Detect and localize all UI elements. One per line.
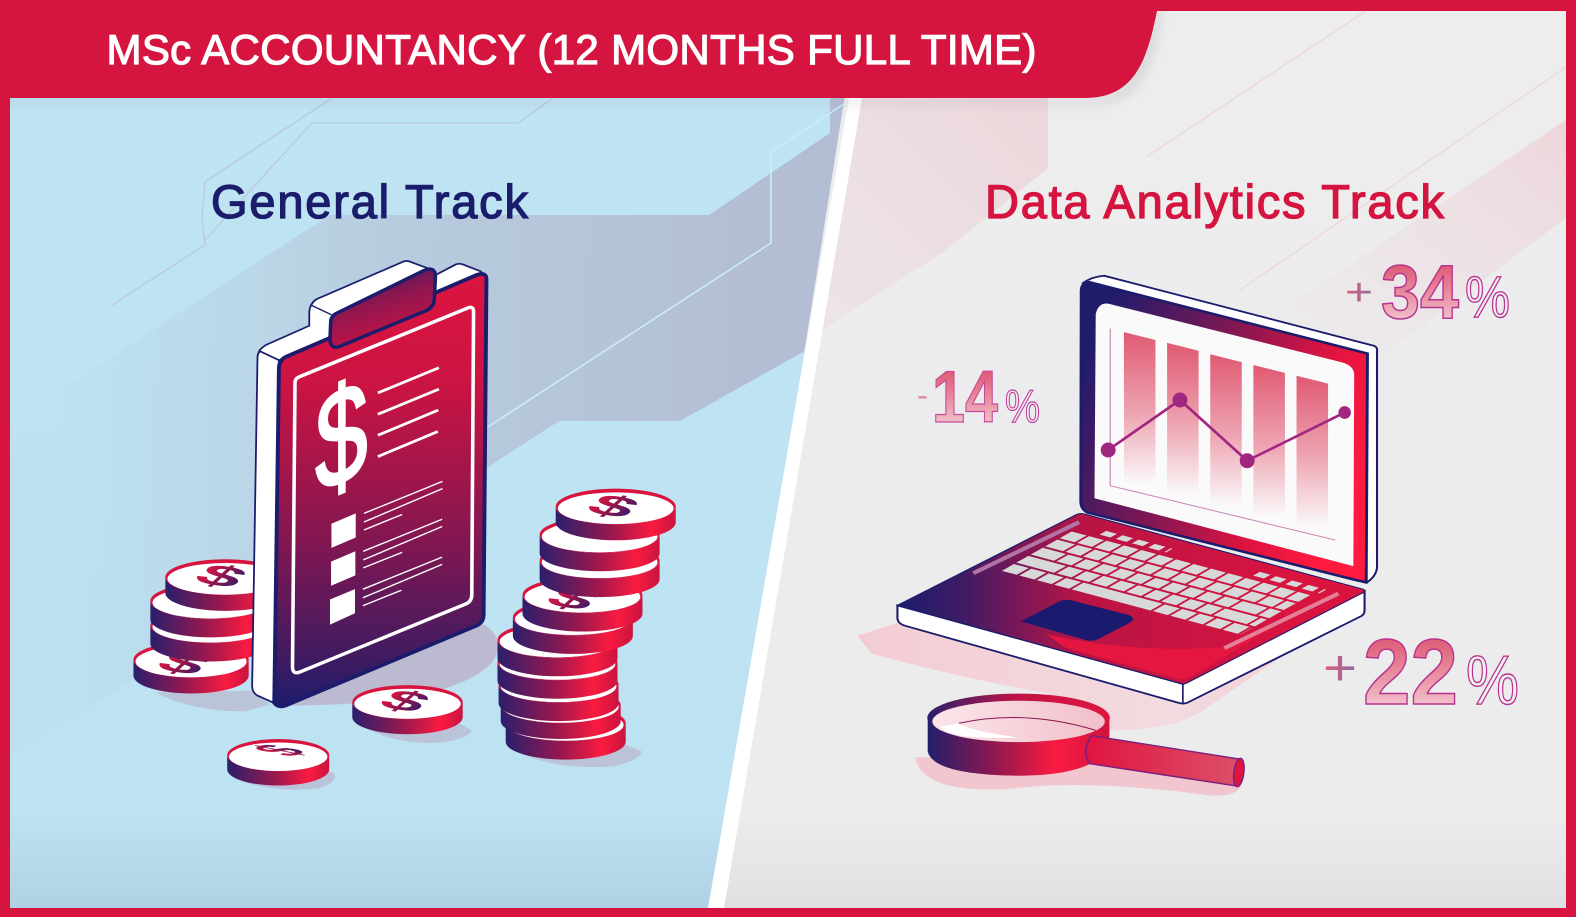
stat: +34%: 34: [1381, 250, 1459, 335]
laptop: trackpad: [1021, 600, 1133, 641]
divider: white diagonal: [708, 98, 862, 908]
clipboard: white edge: [252, 351, 279, 703]
laptop: keyboard: [1008, 527, 1323, 632]
coin stack: left: $: [147, 644, 221, 681]
clipboard: [252, 261, 486, 706]
panel: general track background: [0, 0, 870, 917]
title: MSc ACCOUNTANCY (12 MONTHS FULL TIME): [106, 26, 1036, 73]
stat: -14%: [917, 357, 1040, 438]
header banner: [0, 0, 1157, 98]
chart: axes: [1110, 329, 1335, 540]
magnifier: rim: [927, 694, 1110, 742]
heading: General Track: General Track: [211, 175, 528, 228]
chart: bars: [1124, 332, 1328, 539]
illustration: laptop and magnifier: [857, 276, 1377, 796]
checklist boxes: [330, 513, 356, 625]
clipboard: inner outline: [292, 307, 474, 673]
stat: +34%: [1345, 250, 1510, 335]
shadow: header curve: [0, 11, 1162, 104]
shadow: magnifier: [915, 757, 1241, 796]
document lines: [378, 368, 439, 457]
laptop: deck: [897, 514, 1364, 684]
icon: dollar sign: $: [315, 348, 368, 524]
laptop: lid edge: [1083, 276, 1377, 583]
stat: +34%: %: [1465, 265, 1510, 330]
stat: +22%: +: [1323, 640, 1357, 696]
coin stack: right: $: [577, 487, 651, 524]
laptop: speaker strips: [973, 522, 1338, 648]
heading: Data Analytics Track: Data Analytics Track: [985, 175, 1444, 228]
illustration: clipboard and coins: [133, 261, 676, 790]
stat: +34%: +: [1345, 272, 1373, 314]
laptop: deck highlight: [1046, 614, 1295, 679]
magnifier: [927, 694, 1246, 787]
magnifier: lens: [932, 701, 1105, 742]
stat: -14%: %: [1005, 380, 1040, 432]
laptop: screen frame: [1081, 282, 1367, 582]
stat: -14%: -: [917, 379, 928, 412]
coin stack: right: $: [536, 580, 610, 616]
coin: loose front: $: [239, 741, 322, 760]
magnifier: handle: [1086, 736, 1239, 786]
laptop: screen: [1094, 304, 1354, 566]
panel: data analytics track background: [715, 0, 1576, 917]
stat: +22%: [1323, 620, 1519, 724]
stat: -14%: 14: [932, 357, 998, 438]
stat: +22%: 22: [1363, 620, 1458, 724]
coin stack: left: [133, 557, 285, 694]
coin stack: left: $: [184, 557, 258, 594]
clipboard: clip: [330, 269, 435, 347]
coin: loose centre: $: [369, 684, 440, 719]
checklist lines: [363, 481, 442, 606]
clipboard: board face: [274, 274, 486, 706]
laptop: base edge: [897, 591, 1365, 704]
clipboard: top edge: [259, 261, 484, 360]
coin: loose centre: [352, 684, 463, 734]
stat: +22%: %: [1466, 641, 1519, 719]
laptop: [897, 276, 1377, 704]
chart: line series: [1101, 392, 1351, 468]
shadow: ground shadows: [156, 622, 641, 790]
coin stack: right: [497, 487, 676, 760]
coin: loose front: [227, 739, 329, 786]
magnifier: body: [928, 718, 1109, 776]
shadow: laptop ground shadow: [857, 623, 1307, 730]
